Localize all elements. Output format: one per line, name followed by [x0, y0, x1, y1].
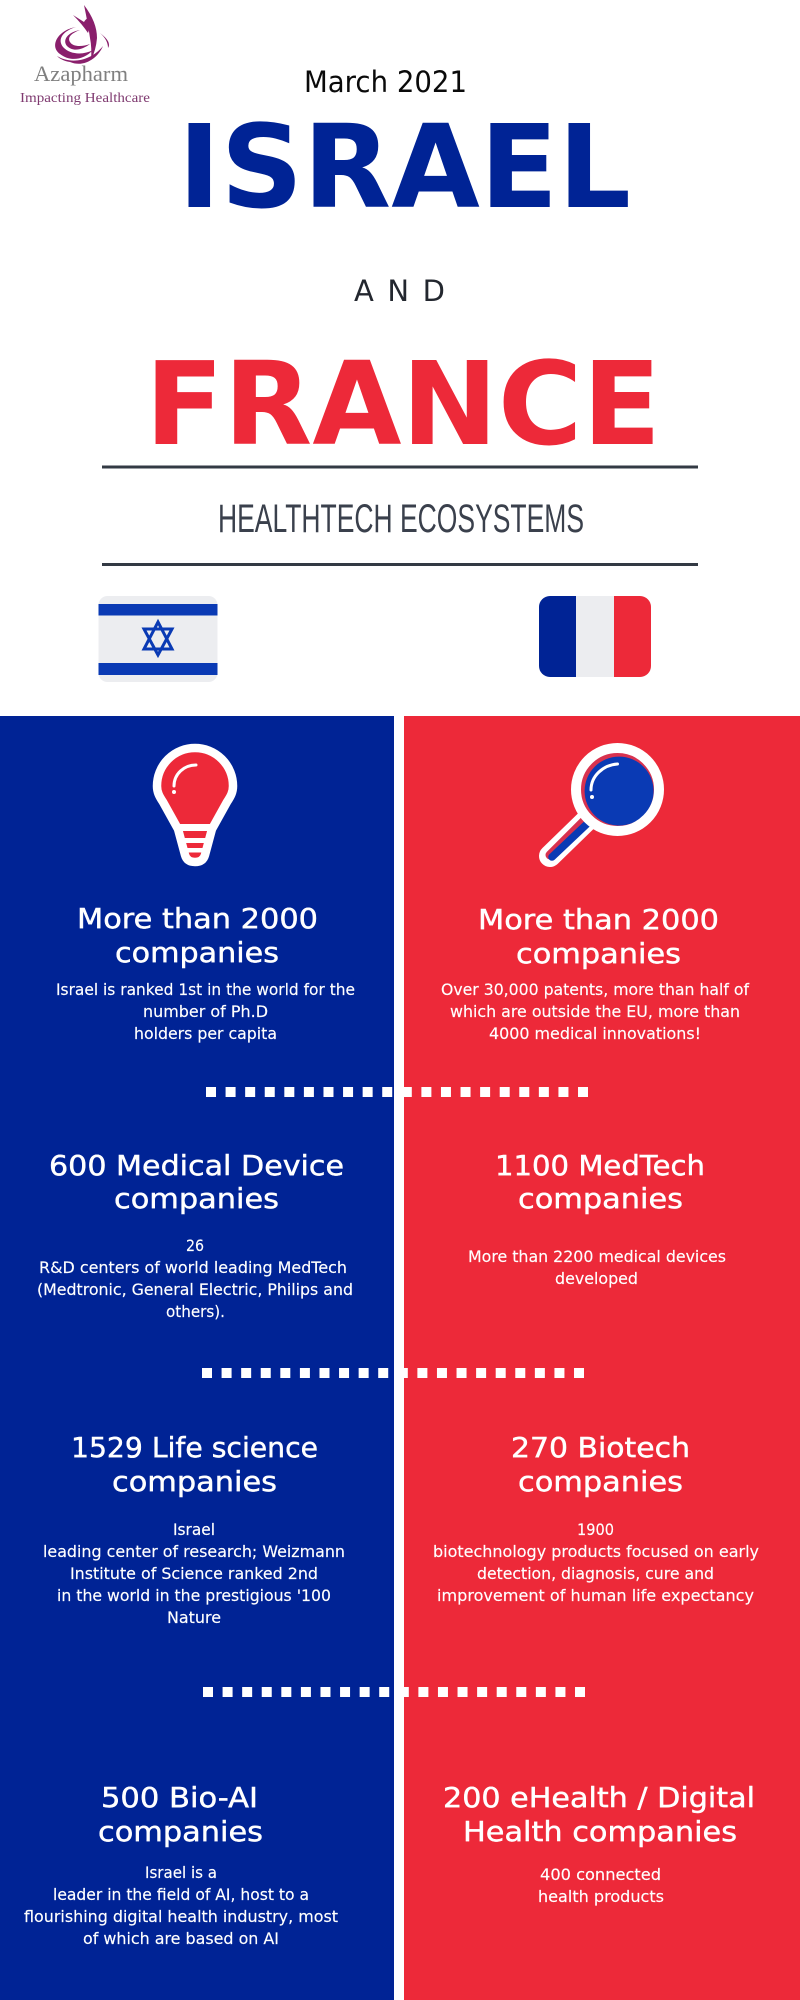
body text: flourishing digital health industry, most: [24, 1907, 338, 1926]
flag: Israel: [98, 596, 218, 682]
heading: More than 2000: [77, 902, 318, 935]
body text: Israel is ranked 1st in the world for the: [56, 980, 355, 999]
body text: number of Ph.D: [143, 1002, 268, 1021]
body text: 26: [186, 1236, 204, 1255]
stat: 200 ehealth companies: [443, 1781, 755, 1906]
body text: others).: [166, 1302, 225, 1321]
body text: [56, 980, 355, 1043]
body text: [538, 1865, 664, 1906]
icon: swirl figure: [55, 5, 109, 64]
title: Israel: ISRAEL: [178, 101, 631, 235]
heading: companies: [115, 936, 279, 969]
body text: 4000 medical innovations!: [489, 1024, 701, 1043]
icon: magnifying glass: [550, 748, 659, 857]
body text: biotechnology products focused on early: [433, 1542, 759, 1561]
body text: [468, 1247, 726, 1288]
icon: light bulb: [157, 748, 235, 862]
stat: 1100 medtech companies: [468, 1149, 726, 1288]
body text: 1900: [577, 1520, 614, 1539]
body text: detection, diagnosis, cure and: [477, 1564, 714, 1583]
body text: leading center of research; Weizmann: [43, 1542, 345, 1561]
title: and: AND: [354, 274, 445, 308]
body text: of which are based on AI: [83, 1929, 279, 1948]
heading: companies: [518, 1465, 683, 1498]
heading: companies: [516, 937, 681, 970]
heading: 270 Biotech: [511, 1431, 690, 1464]
heading: More than 2000: [478, 903, 719, 936]
body text: Israel is a: [145, 1863, 217, 1882]
heading: [49, 1149, 344, 1215]
body text: [43, 1520, 345, 1627]
stat: 600 medical device companies: [37, 1149, 353, 1321]
panel: Israel: [0, 716, 394, 2000]
logo tagline: Impacting Healthcare: [20, 91, 150, 106]
title: France: FRANCE: [145, 338, 661, 472]
heading: 1100 MedTech: [495, 1149, 705, 1182]
heading: [443, 1781, 755, 1848]
body text: [24, 1863, 338, 1948]
heading: companies: [112, 1465, 277, 1498]
body text: R&D centers of world leading MedTech: [39, 1258, 347, 1277]
heading: [478, 903, 719, 970]
body text: [441, 980, 749, 1043]
body text: Nature: [167, 1608, 221, 1627]
body text: [433, 1520, 759, 1605]
heading: 600 Medical Device: [49, 1149, 344, 1182]
heading: companies: [518, 1182, 683, 1215]
heading: [511, 1431, 690, 1498]
logo: Azapharm: [20, 5, 150, 106]
subtitle: HEALTHTECH ECOSYSTEMS: [218, 497, 584, 541]
date: March 2021: [304, 65, 467, 99]
body text: leader in the field of AI, host to a: [53, 1885, 309, 1904]
body text: More than 2200 medical devices: [468, 1247, 726, 1266]
heading: [98, 1781, 263, 1848]
body text: 400 connected: [540, 1865, 661, 1884]
body text: Israel: [173, 1520, 215, 1539]
heading: Health companies: [463, 1815, 737, 1848]
stat: 1529 life science companies: [43, 1431, 345, 1627]
body text: holders per capita: [134, 1024, 277, 1043]
body text: in the world in the prestigious '100: [57, 1586, 331, 1605]
body text: improvement of human life expectancy: [437, 1586, 754, 1605]
heading: [77, 902, 318, 969]
flag: France: [539, 596, 651, 677]
heading: companies: [114, 1182, 279, 1215]
heading: [71, 1431, 318, 1498]
body text: Over 30,000 patents, more than half of: [441, 980, 749, 999]
heading: 500 Bio-AI: [101, 1781, 258, 1814]
stat: more than 2000 companies: [56, 902, 355, 1043]
heading: 200 eHealth / Digital: [443, 1781, 755, 1814]
panel: France: [404, 716, 800, 2000]
heading: companies: [98, 1815, 263, 1848]
stat: more than 2000 companies: [441, 903, 749, 1043]
stat: 270 biotech companies: [433, 1431, 759, 1605]
heading: 1529 Life science: [71, 1431, 318, 1464]
body text: developed: [555, 1269, 638, 1288]
body text: [37, 1236, 353, 1321]
body text: health products: [538, 1887, 664, 1906]
body text: Institute of Science ranked 2nd: [70, 1564, 318, 1583]
heading: [495, 1149, 705, 1215]
body text: which are outside the EU, more than: [450, 1002, 740, 1021]
logo wordmark: Azapharm: [34, 61, 128, 86]
body text: (Medtronic, General Electric, Philips and: [37, 1280, 353, 1299]
stat: 500 bio-AI companies: [24, 1781, 338, 1948]
